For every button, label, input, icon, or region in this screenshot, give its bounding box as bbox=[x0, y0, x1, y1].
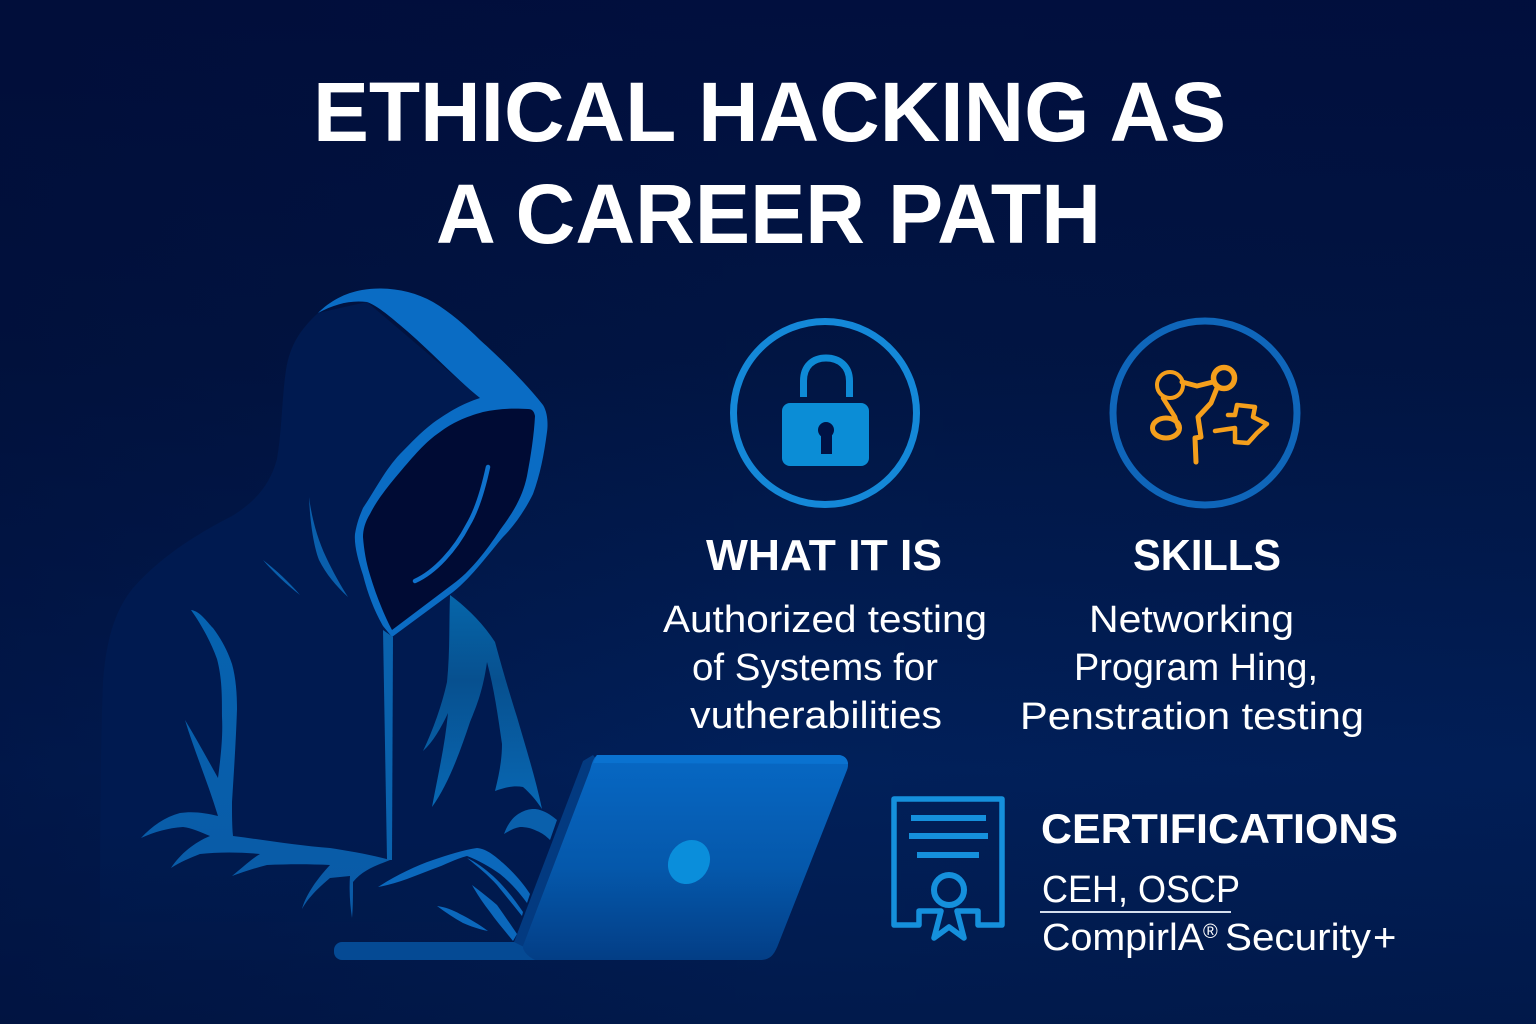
text: certifications list: ® bbox=[1203, 921, 1218, 943]
heading: certifications: CERTIFICATIONS bbox=[1041, 805, 1398, 852]
neck creases bbox=[309, 497, 348, 597]
left arm and sleeve bbox=[141, 610, 390, 918]
text: skills description: Penstration testing bbox=[1020, 696, 1364, 738]
laptop lid top edge bbox=[593, 755, 848, 764]
text: skills description: Program Hing, bbox=[1074, 647, 1318, 689]
illustration: hooded hacker at laptop bbox=[100, 288, 848, 960]
right cuff bbox=[504, 809, 557, 840]
text: certifications list: CompirlA bbox=[1042, 917, 1205, 959]
title: ETHICAL HACKING AS bbox=[313, 65, 1226, 159]
text: skills description: Networking bbox=[1089, 599, 1294, 641]
text: what it is description: Authorized testing bbox=[663, 599, 987, 641]
text: skills description bbox=[1020, 599, 1364, 738]
text: certifications list: + bbox=[1373, 916, 1396, 960]
right shoulder and sleeve bbox=[423, 595, 542, 809]
text: certifications list bbox=[1040, 869, 1396, 960]
icon: skills network bbox=[1113, 321, 1297, 505]
icon: padlock bbox=[734, 322, 916, 504]
heading: skills: SKILLS bbox=[1133, 531, 1281, 580]
heading: what it is: WHAT IT IS bbox=[706, 531, 942, 580]
face shadow bbox=[363, 409, 535, 630]
hood outline bbox=[318, 288, 548, 637]
laptop lid bbox=[523, 755, 848, 960]
hood zip line bbox=[383, 630, 393, 860]
text: certifications list: Security bbox=[1225, 917, 1371, 959]
title bbox=[313, 65, 1226, 261]
hoodie body silhouette bbox=[100, 302, 557, 960]
text: what it is description bbox=[663, 599, 987, 737]
text: what it is description: vutherabilities bbox=[690, 695, 942, 737]
laptop logo bbox=[659, 832, 719, 892]
text: what it is description: of Systems for bbox=[692, 647, 938, 689]
laptop base bbox=[334, 942, 544, 960]
hand bbox=[378, 848, 530, 941]
face highlight curve bbox=[415, 467, 488, 581]
text: certifications list: CEH, OSCP bbox=[1042, 869, 1240, 911]
title: A CAREER PATH bbox=[436, 167, 1101, 261]
laptop hinge edge bbox=[514, 755, 600, 950]
icon: certificate bbox=[894, 799, 1002, 938]
